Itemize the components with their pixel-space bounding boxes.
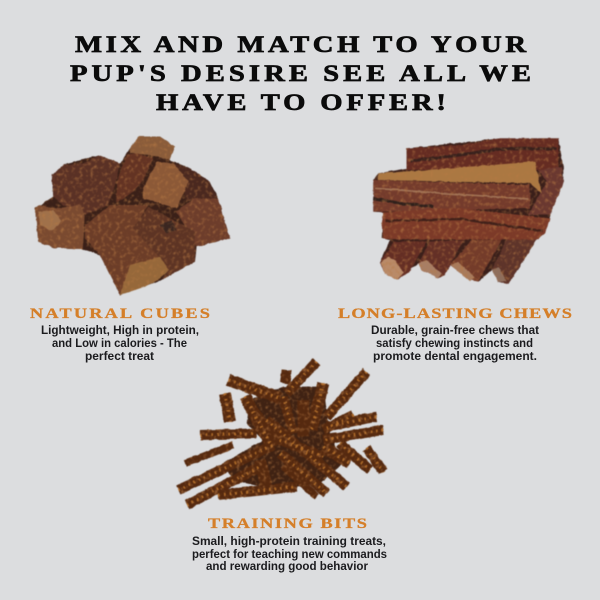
description: natural cubes: and Low in calories - The [52, 338, 187, 350]
title [70, 31, 531, 115]
heading: long-lasting chews: LONG-LASTING CHEWS [338, 305, 572, 322]
description: training bits: Small, high-protein training treats, [192, 536, 386, 548]
title: PUP'S DESIRE SEE ALL WE [70, 60, 531, 86]
description: long-lasting chews: promote dental engagement. [373, 351, 537, 363]
description: long-lasting chews: satisfy chewing instincts and [376, 338, 533, 350]
description: training bits: and rewarding good behavior [206, 561, 369, 573]
product photo: natural cubes [35, 137, 230, 295]
description: natural cubes: Lightweight, High in protein, [41, 325, 199, 337]
heading: natural cubes: NATURAL CUBES [30, 305, 210, 322]
title: HAVE TO OFFER! [156, 89, 446, 115]
description: long-lasting chews [371, 325, 539, 363]
product photo: long-lasting chews [373, 138, 563, 284]
description: training bits: perfect for teaching new commands [192, 549, 387, 561]
description: training bits [192, 536, 387, 573]
product photo: training bits [178, 362, 383, 505]
description: natural cubes: perfect treat [85, 351, 154, 363]
description: long-lasting chews: Durable, grain-free chews that [371, 325, 539, 337]
heading: training bits: TRAINING BITS [208, 515, 367, 532]
description: natural cubes [41, 325, 199, 363]
title: MIX AND MATCH TO YOUR [75, 31, 527, 57]
